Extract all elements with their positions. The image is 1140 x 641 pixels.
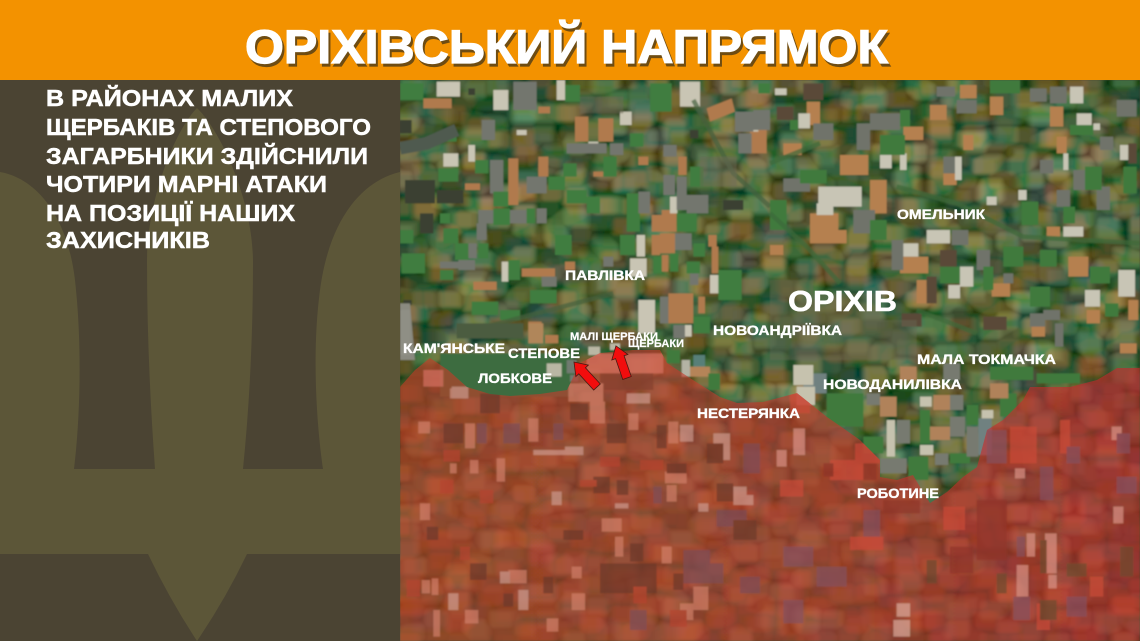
- label: Нестерянка: НЕСТЕРЯНКА: [697, 405, 800, 421]
- satellite map: occupied territory overlay: [400, 340, 1140, 641]
- text block: situation summary: ЩЕРБАКІВ ТА СТЕПОВОГО: [46, 114, 371, 140]
- text block: situation summary: [46, 84, 371, 253]
- label: Мала Токмачка: МАЛА ТОКМАЧКА: [917, 351, 1056, 367]
- arrow: attack toward Stepove: [568, 356, 603, 393]
- label: Степове: СТЕПОВЕ: [508, 345, 580, 361]
- header bar: [0, 0, 1140, 80]
- label: Новоандріївка: НОВОАНДРІЇВКА: [713, 322, 842, 338]
- text block: situation summary: В РАЙОНАХ МАЛИХ: [46, 84, 294, 111]
- text block: situation summary: ЗАГАРБНИКИ ЗДІЙСНИЛИ: [46, 142, 368, 169]
- label: Щербаки: ЩЕРБАКИ: [628, 338, 684, 350]
- text block: situation summary: НА ПОЗИЦІЇ НАШИХ: [46, 200, 296, 226]
- label: Павлівка: ПАВЛІВКА: [565, 267, 645, 283]
- label: Оріхів: ОРІХІВ: [788, 286, 897, 318]
- label: Новоданилівка: НОВОДАНИЛІВКА: [823, 376, 962, 392]
- label: Малі Щербаки: МАЛІ ЩЕРБАКИ: [570, 331, 658, 343]
- label: Роботине: РОБОТИНЕ: [857, 485, 939, 501]
- icon: trident watermark: [0, 108, 400, 641]
- label: Лобкове: ЛОБКОВЕ: [478, 370, 552, 386]
- text block: situation summary: ЗАХИСНИКІВ: [46, 227, 210, 253]
- panel: left background: [0, 80, 400, 641]
- arrow: attack toward Mali Shcherbaky: [608, 343, 635, 381]
- text block: situation summary: ЧОТИРИ МАРНІ АТАКИ: [46, 171, 327, 197]
- label: Кам'янське: КАМ'ЯНСЬКЕ: [403, 340, 505, 356]
- satellite map: free territory fields: [400, 80, 1140, 641]
- title: ОРІХІВСЬКИЙ НАПРЯМОК: [245, 20, 888, 73]
- label: Омельник: ОМЕЛЬНИК: [897, 206, 985, 222]
